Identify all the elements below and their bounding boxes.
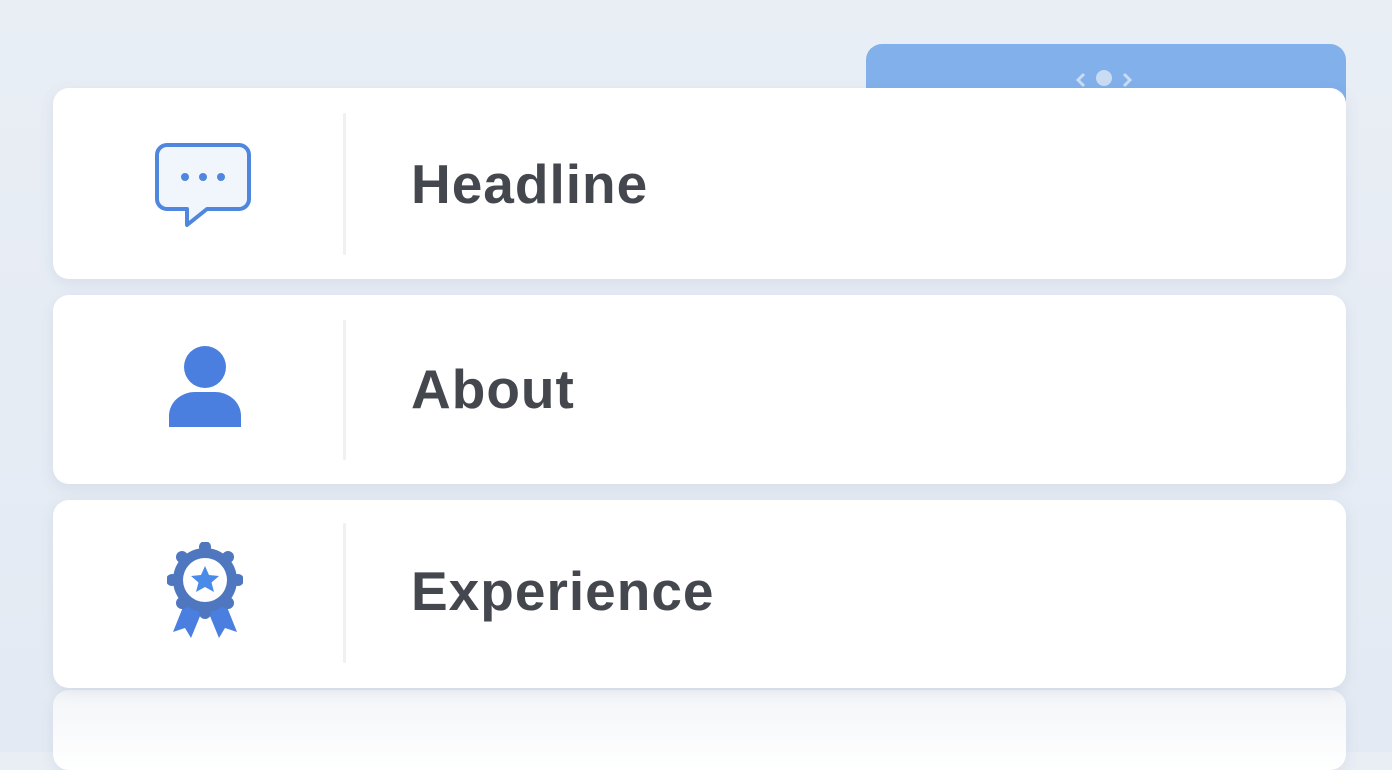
label: Experience: Experience [411,560,715,622]
panel: about [53,295,1346,484]
blue tab behind [866,44,1346,124]
label: Headline: Headline [411,153,648,215]
panel: experience [53,500,1346,688]
icon: chat bubble [155,143,251,228]
background card: bottom [53,690,1346,770]
icon: code person [1076,70,1132,87]
icon: person [169,346,241,427]
panel: headline [53,88,1346,279]
icon: award ribbon [167,542,243,638]
label: About: About [411,358,575,420]
